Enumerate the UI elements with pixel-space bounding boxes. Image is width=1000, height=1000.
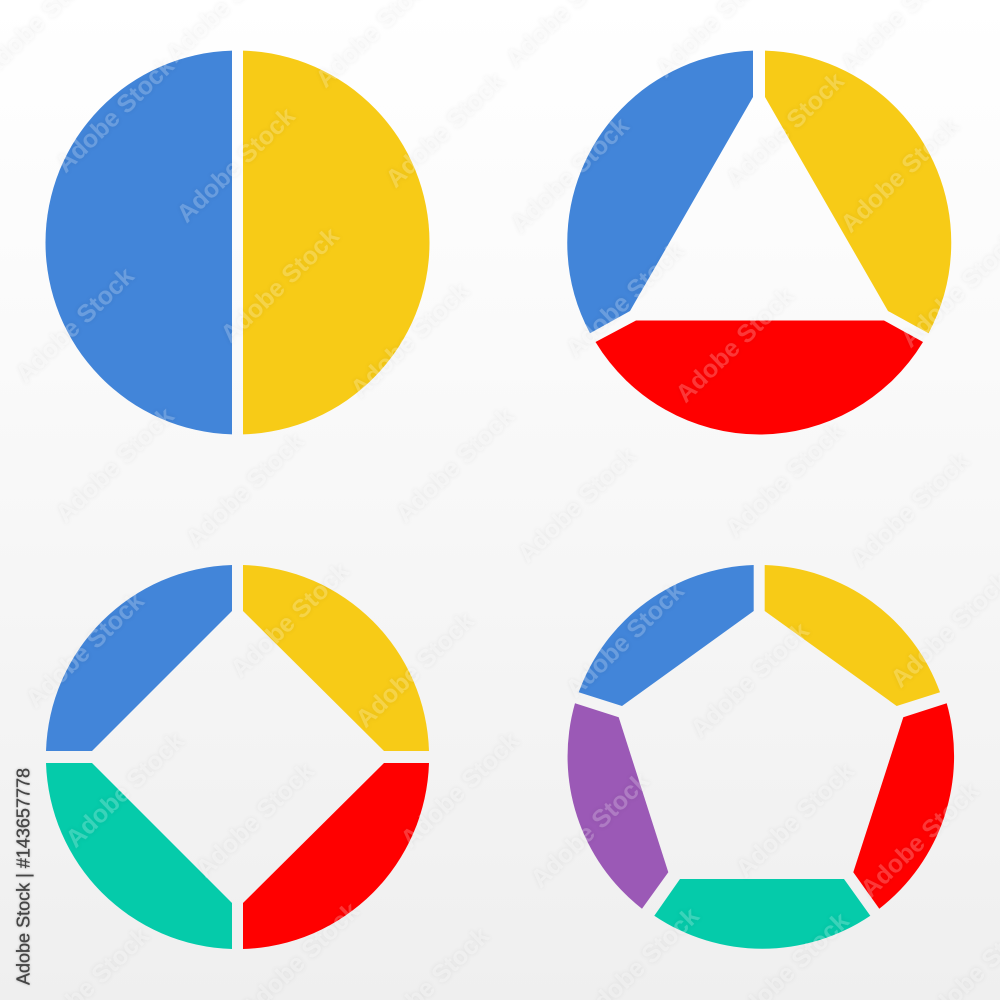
watermark pattern: Adobe Stock	[180, 427, 310, 553]
segment: blue	[567, 51, 753, 333]
circle divided in three segments around a triangle	[567, 51, 951, 434]
watermark pattern: Adobe Stock	[560, 237, 690, 363]
segment: blue half	[46, 51, 232, 434]
watermark pattern: Adobe Stock	[390, 402, 520, 528]
watermark pattern: Adobe Stock	[395, 727, 525, 853]
segment: yellow	[243, 565, 429, 751]
segment: blue	[579, 565, 754, 706]
watermark pattern: Adobe Stock	[350, 607, 480, 733]
watermark pattern: Adobe Stock	[505, 112, 635, 238]
watermark pattern: Adobe Stock	[560, 577, 690, 703]
watermark pattern: Adobe Stock	[835, 112, 965, 238]
circle divided in four segments around a square	[46, 565, 429, 949]
watermark pattern: Adobe Stock	[512, 442, 642, 568]
segment: red	[596, 320, 923, 434]
watermark pattern: Adobe Stock	[10, 262, 140, 388]
watermark pattern: Adobe Stock	[380, 67, 510, 193]
segment: yellow	[765, 565, 940, 706]
watermark pattern: Adobe Stock	[60, 727, 190, 853]
segment: blue	[46, 565, 232, 751]
watermark pattern: Adobe Stock	[50, 402, 180, 528]
segment: green	[654, 879, 870, 949]
watermark pattern: Adobe Stock	[845, 447, 975, 573]
watermark pattern: Adobe Stock	[720, 67, 850, 193]
watermark pattern: Adobe Stock	[685, 617, 815, 743]
watermark pattern: Adobe Stock	[525, 767, 655, 893]
watermark pattern: Adobe Stock	[215, 222, 345, 348]
watermark pattern: Adobe Stock	[670, 282, 800, 408]
segment: yellow half	[243, 51, 430, 434]
segment: yellow	[765, 51, 951, 333]
watermark pattern: Adobe Stock	[20, 587, 150, 713]
watermark pattern: Adobe Stock	[855, 777, 985, 903]
segment: green	[46, 763, 232, 949]
watermark pattern: Adobe Stock	[171, 102, 301, 228]
circle divided in two segments	[46, 51, 430, 434]
watermark pattern: Adobe Stock	[190, 757, 320, 883]
segment: red	[243, 763, 429, 949]
watermark pattern: Adobe Stock	[730, 757, 860, 883]
watermark pattern: Adobe Stock	[720, 417, 850, 543]
watermark pattern: Adobe Stock	[225, 557, 355, 683]
side credit text: Adobe Stock | #143657778	[14, 768, 34, 985]
segment: red	[853, 703, 954, 909]
watermark pattern: Adobe Stock	[50, 52, 180, 178]
circle divided in five segments around a pentagon	[568, 565, 954, 949]
watermark pattern: Adobe Stock	[345, 277, 475, 403]
segment: purple	[568, 703, 668, 909]
